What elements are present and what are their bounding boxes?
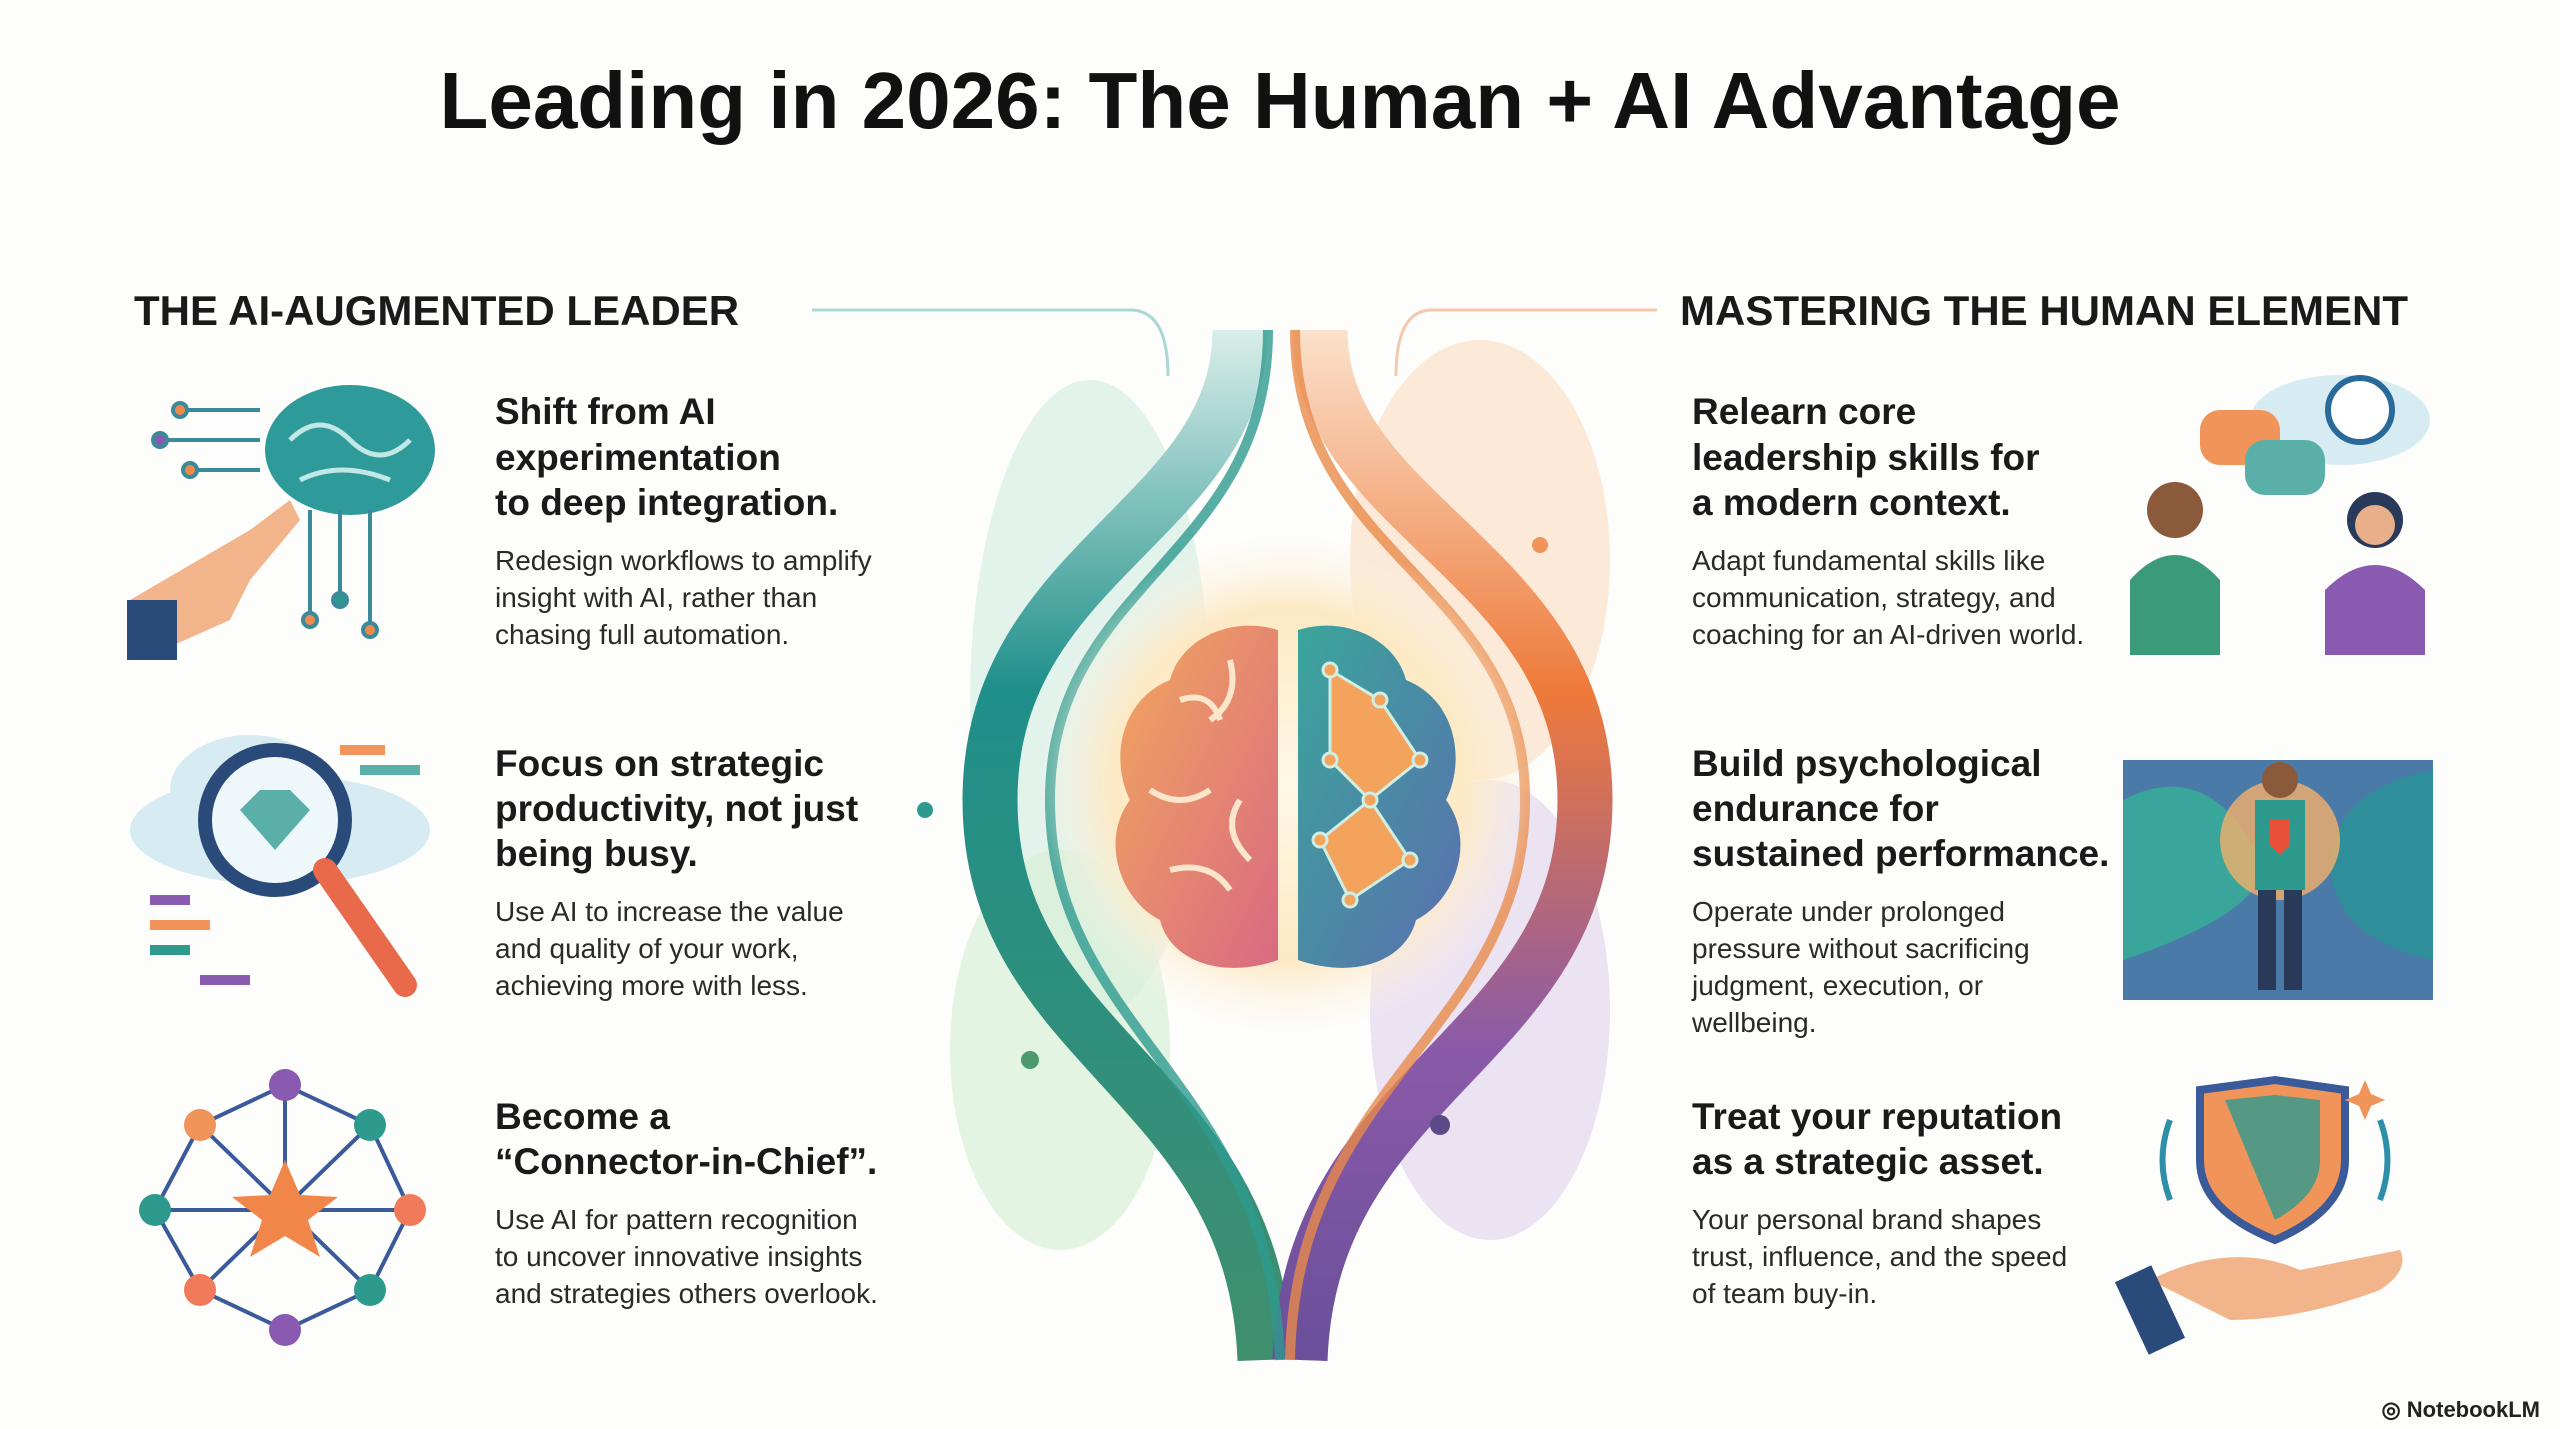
icon: network with star xyxy=(139,1069,426,1346)
item 1 left: experimentation xyxy=(495,437,781,478)
icon: shield on hand xyxy=(2115,1080,2402,1355)
item 3 right: of team buy-in. xyxy=(1692,1278,1877,1309)
item 1 right xyxy=(1692,375,2430,655)
icon: brain with circuits and hand xyxy=(127,385,435,660)
icon: person in waves xyxy=(2123,760,2433,1000)
item 3 right: Your personal brand shapes xyxy=(1692,1204,2041,1235)
item 3 left xyxy=(139,1069,878,1346)
item 3 left: “Connector-in-Chief”. xyxy=(495,1141,877,1182)
item 1 left: chasing full automation. xyxy=(495,619,789,650)
heading: right xyxy=(1396,287,2408,376)
item 3 left: to uncover innovative insights xyxy=(495,1241,862,1272)
item 1 right: Adapt fundamental skills like xyxy=(1692,545,2045,576)
item 2 left: Focus on strategic xyxy=(495,743,824,784)
item 2 right xyxy=(1691,743,2433,1038)
heading: left xyxy=(134,287,1168,376)
item 3 left: Use AI for pattern recognition xyxy=(495,1204,858,1235)
item 3 left: Become a xyxy=(495,1096,670,1137)
item 2 left: Use AI to increase the value xyxy=(495,896,844,927)
item 3 right: trust, influence, and the speed xyxy=(1692,1241,2067,1272)
icon: cloud with magnifier and diamond xyxy=(130,735,430,985)
title: Leading in 2026: The Human + AI Advantage xyxy=(439,56,2121,145)
item 2 left: achieving more with less. xyxy=(495,970,808,1001)
brain right xyxy=(1298,626,1460,968)
item 2 right: Operate under prolonged xyxy=(1692,896,2005,927)
heading: left: THE AI-AUGMENTED LEADER xyxy=(134,287,739,334)
item 2 right: judgment, execution, or xyxy=(1691,970,1983,1001)
item 3 right: as a strategic asset. xyxy=(1692,1141,2044,1182)
item 1 right: a modern context. xyxy=(1692,482,2011,523)
item 2 left xyxy=(130,735,858,1001)
item 1 left: Shift from AI xyxy=(495,391,716,432)
item 2 right: endurance for xyxy=(1692,788,1939,829)
heading: right: MASTERING THE HUMAN ELEMENT xyxy=(1680,287,2408,334)
item 1 right: Relearn core xyxy=(1692,391,1916,432)
item 1 left: to deep integration. xyxy=(495,482,838,523)
item 2 right: pressure without sacrificing xyxy=(1692,933,2030,964)
item 3 left: and strategies others overlook. xyxy=(495,1278,878,1309)
brain left xyxy=(1116,626,1278,968)
item 2 right: sustained performance. xyxy=(1692,833,2109,874)
item 1 left: Redesign workflows to amplify xyxy=(495,545,872,576)
item 2 left: productivity, not just xyxy=(495,788,858,829)
item 1 right: leadership skills for xyxy=(1692,437,2040,478)
item 1 right: communication, strategy, and xyxy=(1692,582,2056,613)
item 2 right: Build psychological xyxy=(1692,743,2042,784)
item 1 left xyxy=(127,385,872,660)
center graphic xyxy=(917,330,1610,1360)
item 3 right: Treat your reputation xyxy=(1692,1096,2062,1137)
item 1 left: insight with AI, rather than xyxy=(495,582,817,613)
icon: two people talking xyxy=(2130,375,2430,655)
item 1 right: coaching for an AI-driven world. xyxy=(1692,619,2084,650)
item 2 left: being busy. xyxy=(495,833,698,874)
item 2 right: wellbeing. xyxy=(1691,1007,1817,1038)
item 3 right xyxy=(1692,1080,2402,1355)
item 2 left: and quality of your work, xyxy=(495,933,798,964)
footer: NotebookLM: ◎ NotebookLM xyxy=(2381,1397,2540,1422)
